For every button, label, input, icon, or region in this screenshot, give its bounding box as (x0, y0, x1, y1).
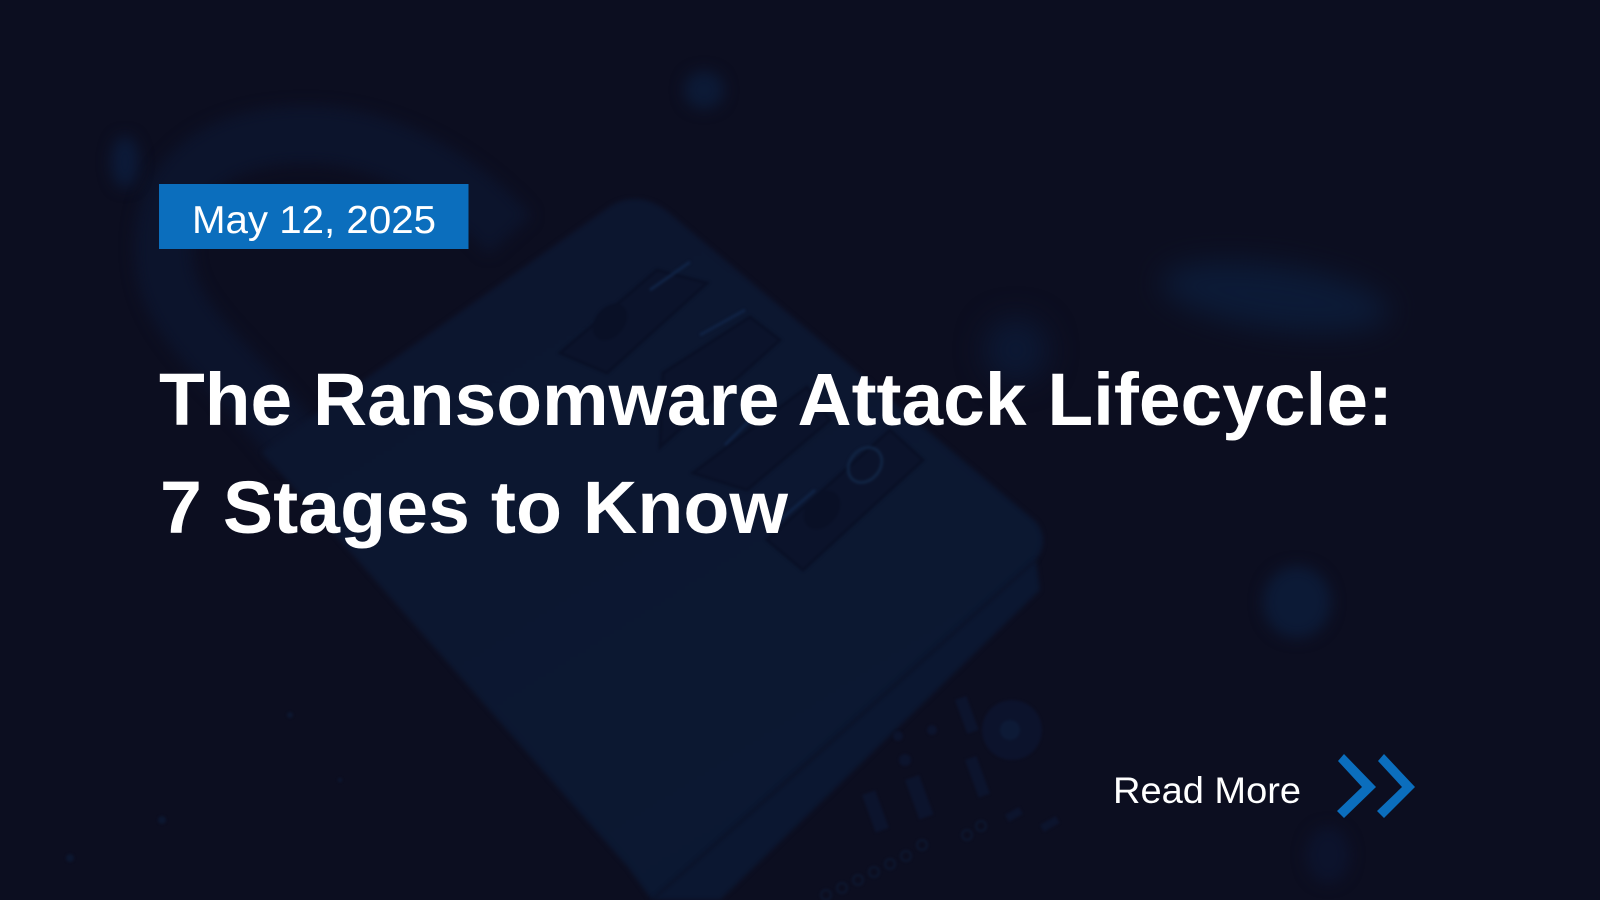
circuit board lower left detail (66, 712, 342, 862)
date badge (159, 184, 468, 249)
title: 7 Stages to Know (160, 466, 788, 549)
padlock body (262, 199, 1043, 900)
title (159, 358, 1393, 549)
circuit board detail (821, 696, 1060, 900)
read more link (1113, 754, 1415, 818)
title: The Ransomware Attack Lifecycle: (159, 358, 1393, 441)
background glow blobs (684, 71, 1393, 883)
date badge: May 12, 2025 (192, 199, 436, 242)
read more link: Read More (1113, 770, 1301, 811)
icon: double chevron arrow (1337, 754, 1415, 818)
padlock shackle (111, 135, 510, 450)
padlock combination dials (560, 262, 923, 570)
